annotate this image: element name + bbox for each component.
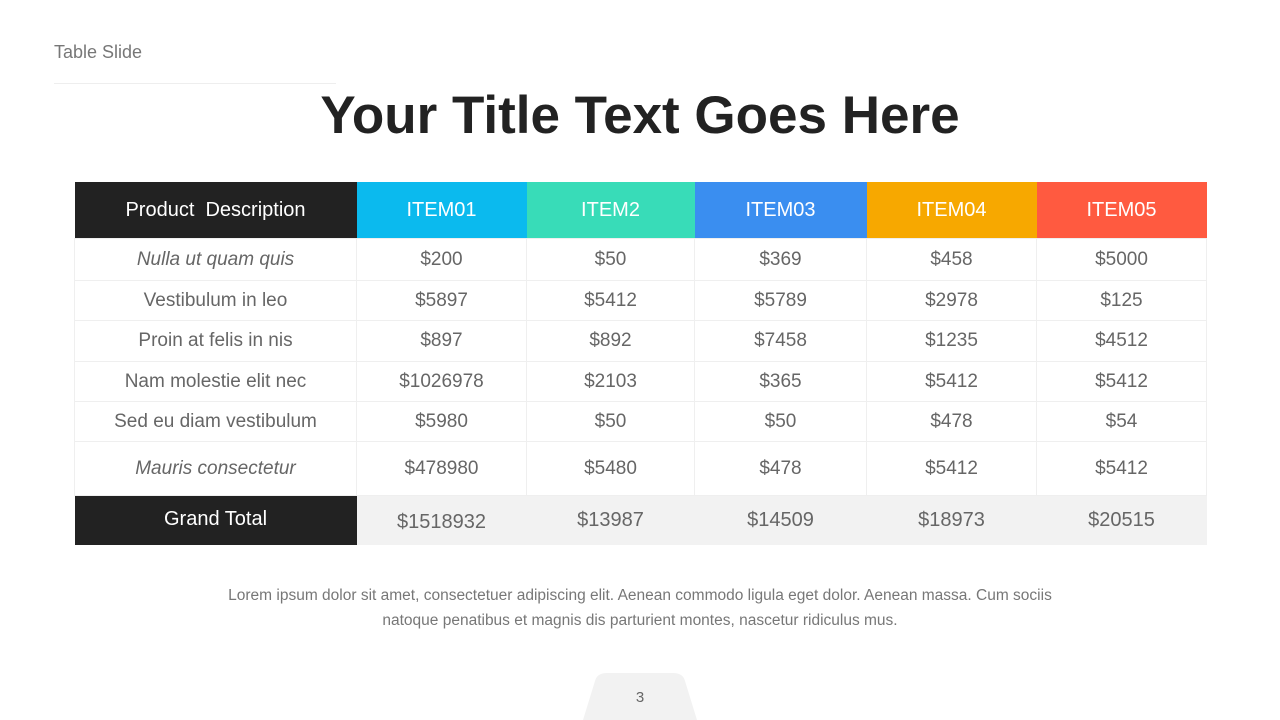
- table: $5480: [584, 458, 637, 478]
- table: $892: [589, 330, 632, 351]
- table: $5980: [415, 410, 468, 432]
- table: $897: [420, 330, 463, 351]
- table: $5412: [1095, 370, 1148, 392]
- table: $2103: [584, 370, 637, 392]
- table: Proin at felis in nis: [138, 330, 293, 351]
- table: ITEM01: [406, 198, 477, 220]
- table: $5412: [925, 458, 978, 478]
- description text: natoque penatibus et magnis dis parturient montes, nascetur ridiculus mus.: [382, 612, 898, 629]
- table: $5897: [415, 290, 468, 310]
- table: $7458: [754, 330, 807, 351]
- table: $458: [930, 248, 973, 270]
- table: $5412: [1095, 458, 1148, 478]
- table: $50: [595, 410, 626, 432]
- table: Product Description: [125, 198, 306, 220]
- table: $369: [759, 248, 802, 270]
- table: $4512: [1095, 330, 1148, 351]
- table: $478: [759, 458, 802, 478]
- table: Grand Total: [164, 508, 267, 530]
- table: $13987: [577, 509, 644, 531]
- table: $14509: [747, 509, 814, 531]
- table: $200: [420, 248, 463, 270]
- table: ITEM03: [745, 198, 816, 220]
- table: $478: [930, 410, 973, 432]
- table: $18973: [918, 509, 985, 531]
- description text: [228, 587, 1052, 629]
- table: $20515: [1088, 509, 1155, 531]
- page number tab: [583, 673, 697, 720]
- table: [74, 182, 1207, 545]
- table: $50: [765, 410, 796, 432]
- table: $50: [595, 248, 626, 270]
- table: Nulla ut quam quis: [137, 248, 294, 270]
- page number tab: 3: [636, 689, 644, 706]
- table: $1518932: [397, 511, 486, 533]
- table: $5412: [584, 290, 637, 310]
- table: ITEM2: [581, 198, 640, 220]
- table: $125: [1100, 290, 1143, 310]
- table: Sed eu diam vestibulum: [114, 410, 317, 432]
- table: $365: [759, 370, 802, 392]
- table: $5412: [925, 370, 978, 392]
- table: $1235: [925, 330, 978, 351]
- table: $5789: [754, 290, 807, 310]
- table: $5000: [1095, 248, 1148, 270]
- table: Nam molestie elit nec: [125, 370, 306, 392]
- table: $54: [1106, 410, 1137, 432]
- table: Vestibulum in leo: [144, 290, 287, 310]
- table: ITEM04: [916, 198, 987, 220]
- table: $1026978: [399, 370, 484, 392]
- table: Mauris consectetur: [135, 458, 296, 478]
- table: $478980: [405, 458, 478, 478]
- label: Table Slide: Table Slide: [54, 42, 142, 62]
- title: Your Title Text Goes Here: [320, 86, 960, 145]
- table: ITEM05: [1086, 198, 1157, 220]
- description text: Lorem ipsum dolor sit amet, consectetuer adipiscing elit. Aenean commodo ligula eget dolor. Aenean massa. Cum sociis: [228, 587, 1052, 604]
- table: $2978: [925, 290, 978, 310]
